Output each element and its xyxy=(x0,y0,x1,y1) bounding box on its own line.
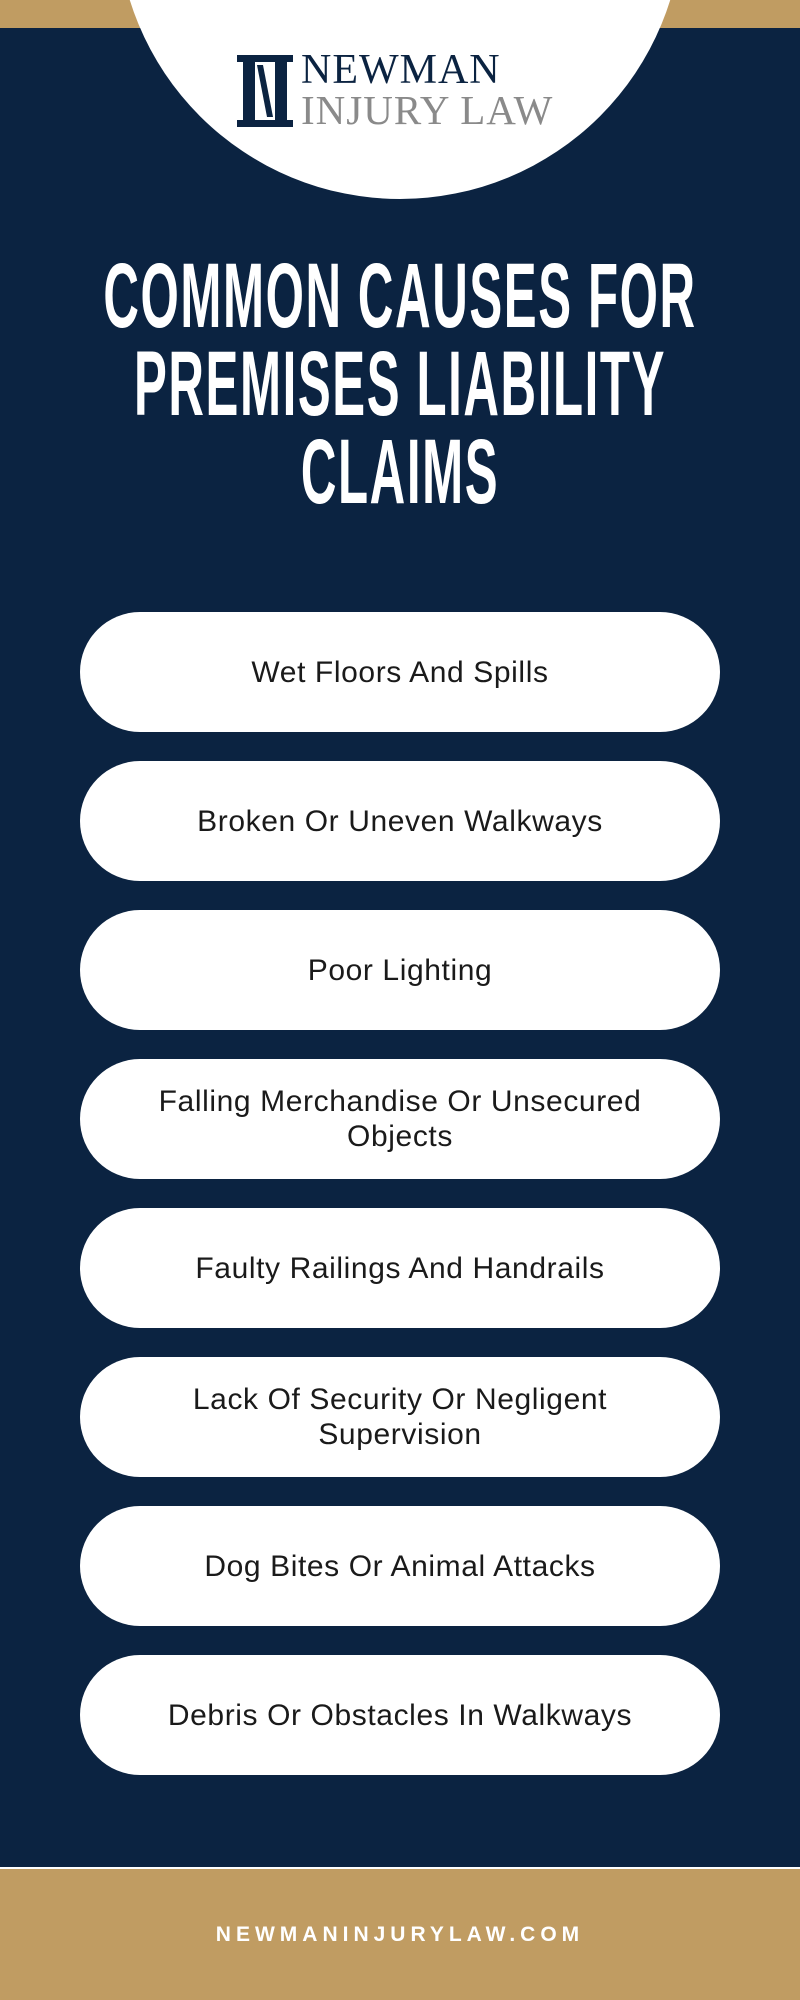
logo xyxy=(237,47,553,133)
pill: 5 xyxy=(80,1208,720,1328)
pill: 3: Poor Lighting xyxy=(308,954,492,986)
pill: 8 xyxy=(80,1655,720,1775)
pill: 4: Falling Merchandise Or Unsecured Objects xyxy=(159,1085,641,1153)
footer band xyxy=(0,1867,800,2000)
pill: 1: Wet Floors And Spills xyxy=(251,656,549,688)
pill: 6: Lack Of Security Or Negligent Supervision xyxy=(193,1383,607,1451)
title xyxy=(103,245,697,523)
title: COMMON CAUSES FOR xyxy=(103,245,697,347)
title: CLAIMS xyxy=(301,421,499,523)
top gold band xyxy=(0,0,800,28)
logo: INJURY LAW xyxy=(301,87,553,133)
pill: 6 xyxy=(80,1357,720,1477)
logo circle xyxy=(117,0,683,199)
icon: pillar N xyxy=(237,55,293,127)
footer url: NEWMANINJURYLAW.COM xyxy=(216,1923,584,1946)
pill: 7 xyxy=(80,1506,720,1626)
pill: 4 xyxy=(80,1059,720,1179)
pill: 2: Broken Or Uneven Walkways xyxy=(197,804,603,838)
pill: 8: Debris Or Obstacles In Walkways xyxy=(168,1698,632,1732)
logo text: NEWMAN xyxy=(301,47,501,93)
pill: 2 xyxy=(80,761,720,881)
pill: 7: Dog Bites Or Animal Attacks xyxy=(204,1550,596,1582)
pill: 1 xyxy=(80,612,720,732)
pill: 5: Faulty Railings And Handrails xyxy=(195,1252,605,1284)
pill: 3 xyxy=(80,910,720,1030)
title: PREMISES LIABILITY xyxy=(134,333,666,435)
